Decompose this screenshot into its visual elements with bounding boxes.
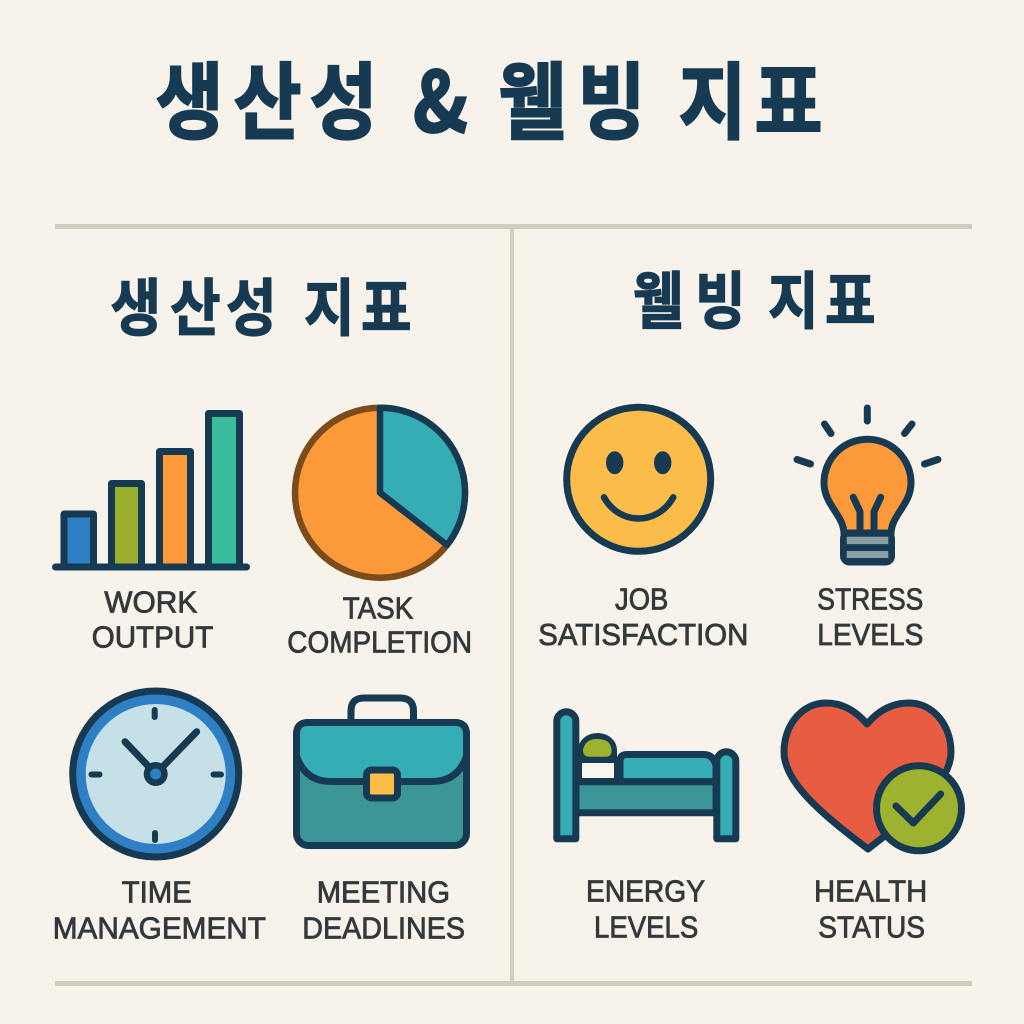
label: energy levels — [586, 874, 705, 944]
label: health status: STATUS — [818, 909, 925, 944]
label: work output: OUTPUT — [92, 619, 213, 654]
label: health status — [814, 874, 927, 944]
icon: work output bar chart — [56, 414, 246, 567]
icon: time management clock — [69, 688, 242, 860]
icon: energy levels bed — [557, 712, 736, 839]
label: stress levels: LEVELS — [817, 617, 923, 652]
label: work output: WORK — [104, 585, 198, 620]
dividers — [55, 224, 972, 986]
title: 생산성 & 웰빙 지표 — [156, 35, 823, 156]
label: health status: HEALTH — [814, 874, 927, 909]
label: time management: TIME — [122, 875, 192, 910]
heading: productivity metrics: 생산성 지표 — [110, 258, 412, 348]
icon: stress levels light bulb — [797, 408, 938, 562]
icon: health status heart with check — [784, 703, 962, 851]
label: work output — [92, 585, 213, 654]
label: job satisfaction — [538, 581, 748, 652]
label: job satisfaction: SATISFACTION — [538, 617, 748, 652]
label: energy levels: ENERGY — [586, 874, 705, 909]
label: energy levels: LEVELS — [594, 909, 698, 944]
label: meeting deadlines — [302, 875, 465, 945]
icon: job satisfaction smiley — [567, 407, 711, 551]
label: stress levels — [817, 581, 923, 652]
heading: wellbeing metrics: 웰빙 지표 — [633, 251, 876, 341]
label: time management — [53, 875, 266, 945]
icon: meeting deadlines briefcase — [296, 698, 466, 846]
label: stress levels: STRESS — [817, 581, 923, 616]
label: meeting deadlines: MEETING — [317, 875, 450, 910]
label: task completion: COMPLETION — [287, 624, 472, 659]
label: task completion — [287, 590, 472, 659]
label: time management: MANAGEMENT — [53, 910, 266, 945]
label: job satisfaction: JOB — [615, 581, 668, 616]
label: task completion: TASK — [343, 590, 414, 625]
label: meeting deadlines: DEADLINES — [302, 910, 465, 945]
icon: task completion pie chart — [295, 408, 465, 578]
